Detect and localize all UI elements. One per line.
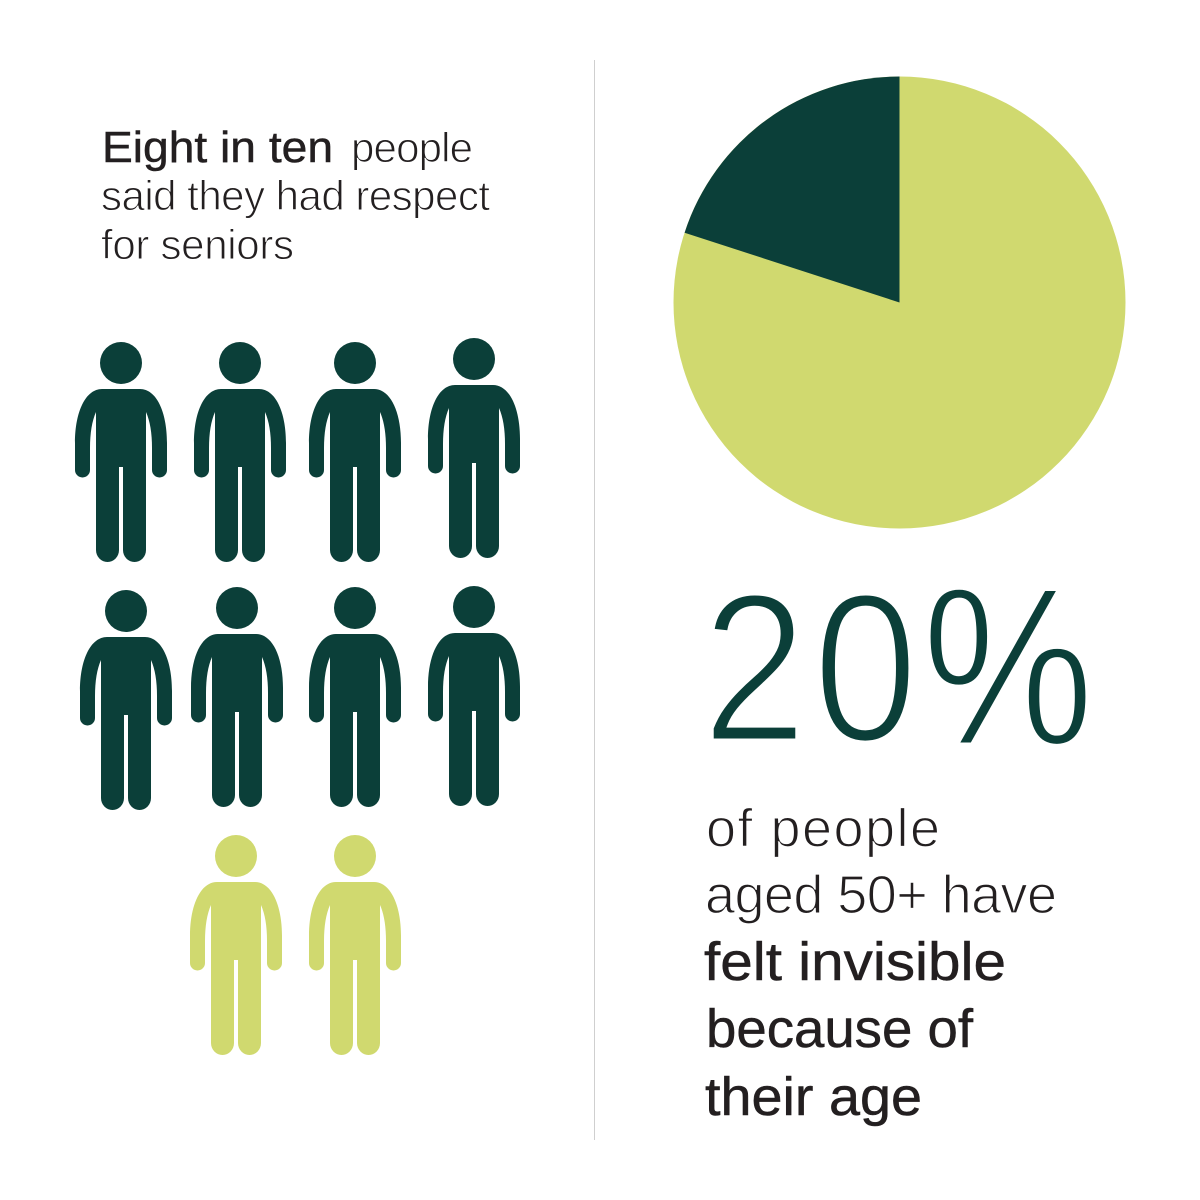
big number: 20%: %	[922, 540, 1094, 792]
big number: 20%: 2	[702, 549, 807, 786]
right text block: their age	[705, 1067, 922, 1127]
pictogram: ten people, eight dark and two light	[75, 338, 520, 1055]
left heading: eight in ten: for seniors	[101, 221, 294, 268]
pie chart: 20 percent	[674, 76, 1126, 528]
left heading: eight in ten: said they had respect	[101, 172, 490, 219]
right text block: because of	[706, 999, 974, 1059]
big number: 20%: 0	[813, 549, 918, 786]
right text block: of people	[706, 798, 940, 858]
big number: 20%	[702, 540, 1094, 792]
right text block: aged 50+ have	[705, 865, 1057, 925]
right text block: felt invisible	[704, 932, 1006, 992]
left heading: eight in ten: Eight in ten	[102, 123, 333, 172]
left heading: eight in ten	[101, 123, 490, 268]
left heading: eight in ten: people	[351, 124, 473, 171]
row 3 light people	[190, 835, 401, 1055]
row 2 dark people	[80, 586, 520, 810]
right text block	[704, 798, 1057, 1127]
row 1 dark people	[75, 338, 520, 562]
